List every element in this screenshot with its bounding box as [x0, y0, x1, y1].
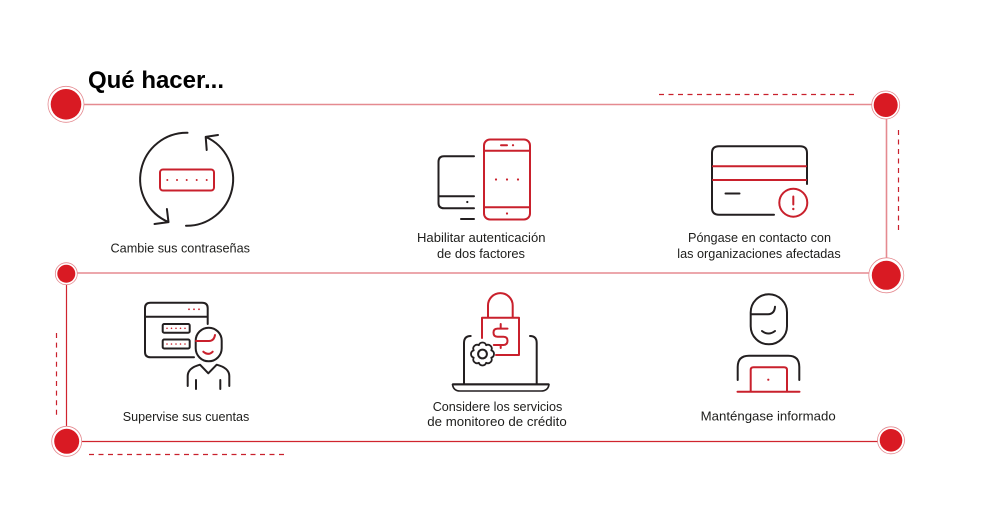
label: credit monitoring: Considere los servicios	[433, 399, 562, 414]
node: middle right	[869, 258, 904, 293]
label: contact organizations: las organizaciones afectadas	[677, 246, 841, 261]
label: stay informed: Manténgase informado	[701, 408, 836, 423]
label: contact organizations: Póngase en contacto con	[688, 230, 831, 245]
icon: change passwords	[140, 133, 233, 226]
node: middle left	[55, 263, 77, 285]
title: Qué hacer...	[88, 67, 224, 94]
node: top right	[872, 91, 900, 119]
label: monitor accounts: Supervise sus cuentas	[123, 409, 249, 424]
label: change passwords: Cambie sus contraseñas	[110, 241, 250, 256]
label: credit monitoring: de monitoreo de crédito	[427, 414, 567, 429]
icon: card alert	[712, 146, 807, 217]
icon: credit monitoring	[452, 293, 549, 391]
label: two-factor authentication: de dos factores	[437, 246, 525, 261]
icon: stay informed	[738, 294, 800, 392]
node: top left	[48, 86, 84, 122]
icon: two-factor authentication	[438, 140, 530, 220]
icon: monitor accounts	[145, 303, 229, 389]
circuit frame	[56, 94, 898, 454]
label: two-factor authentication: Habilitar autenticación	[417, 230, 546, 245]
node: bottom left	[52, 426, 82, 456]
node: bottom right	[878, 427, 904, 454]
